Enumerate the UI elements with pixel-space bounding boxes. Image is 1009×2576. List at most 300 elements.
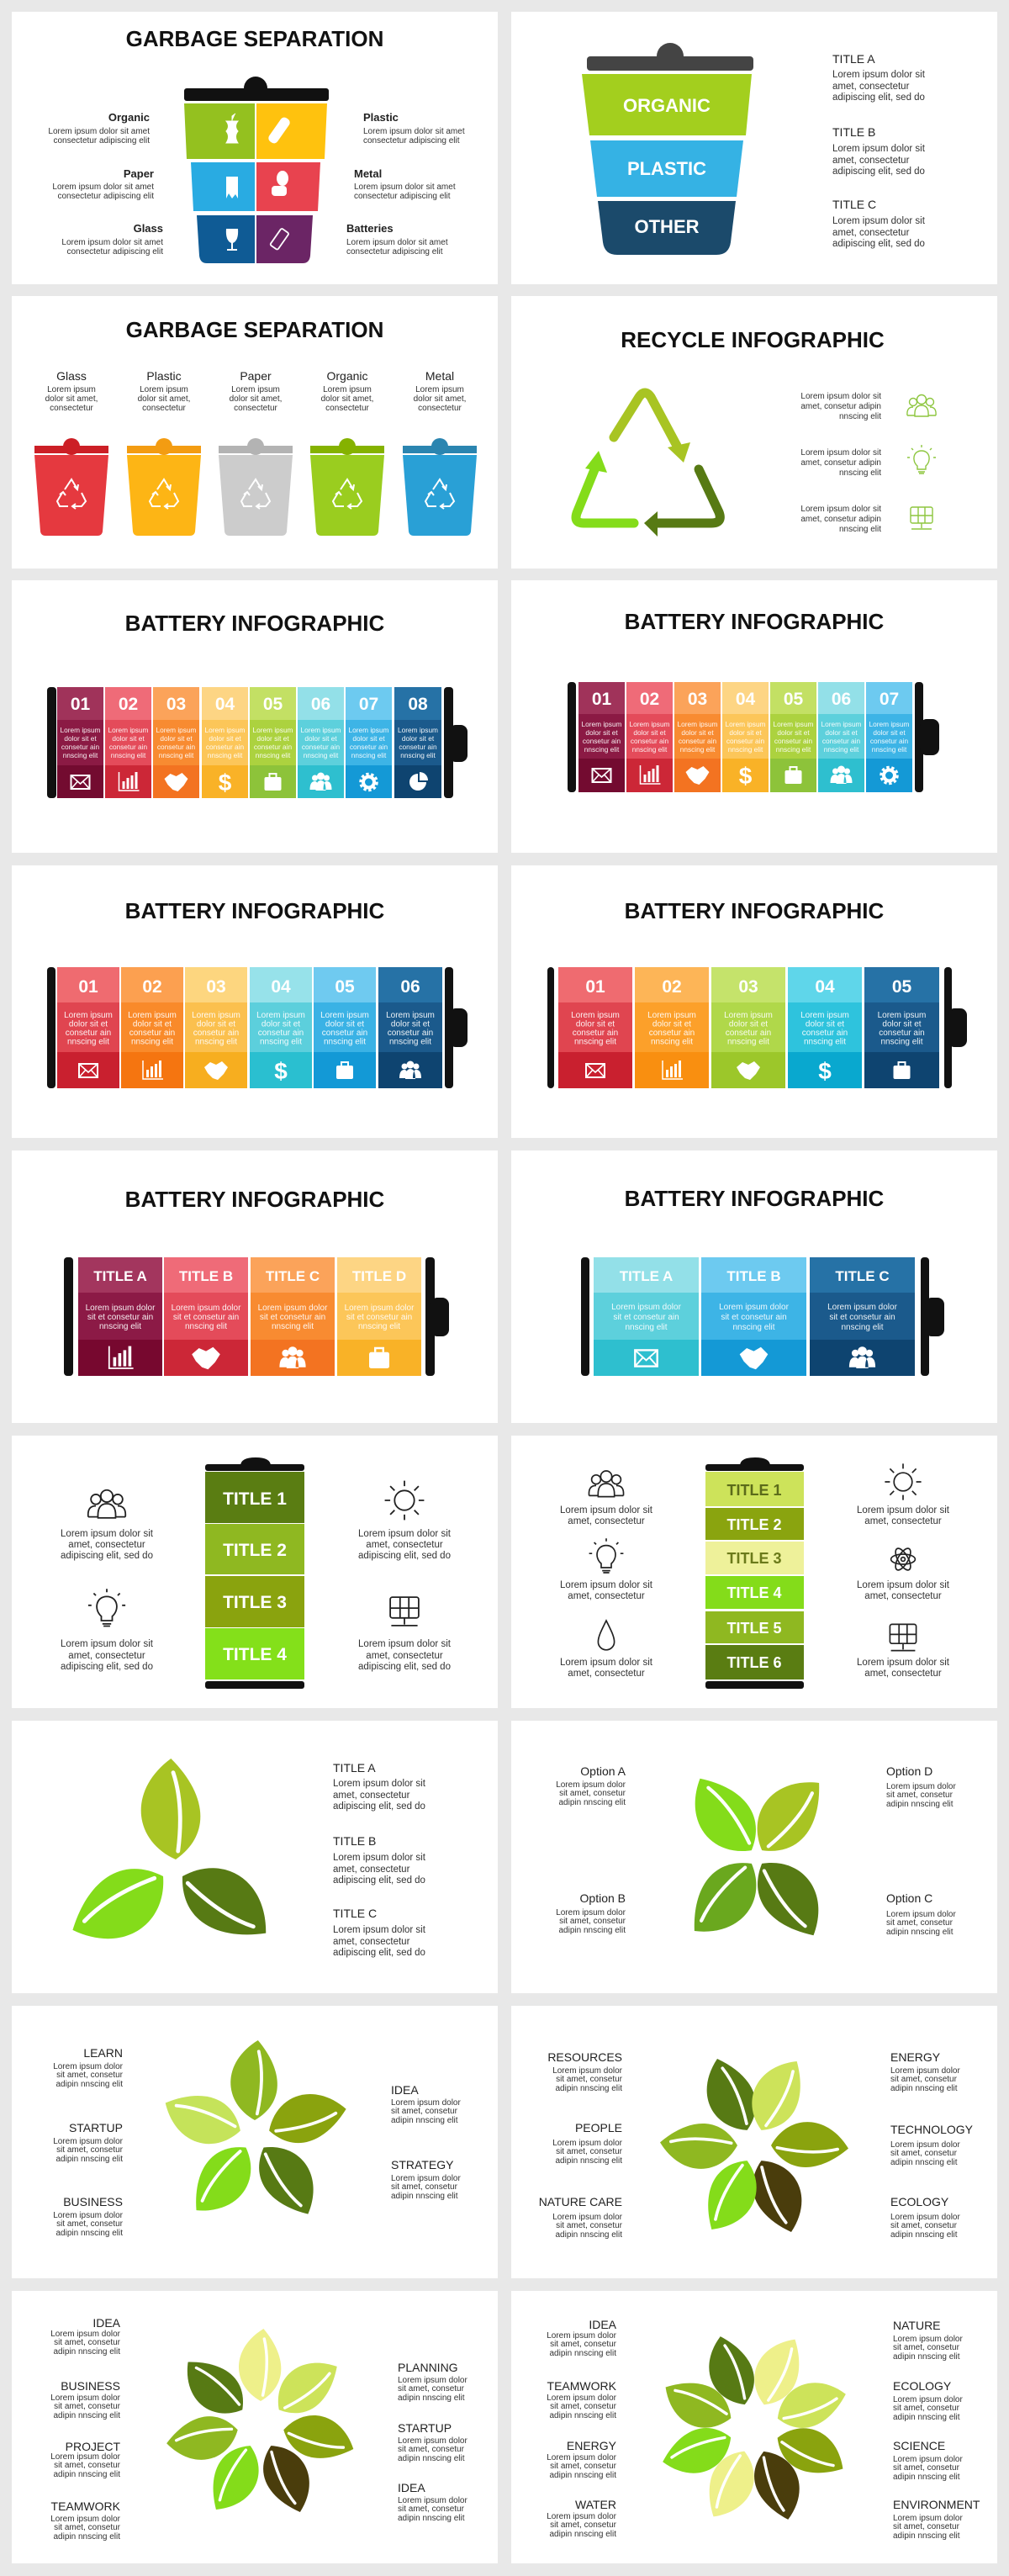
text blocks: amet, consectetur [333,1865,410,1875]
labels: TEAMWORK [547,2379,617,2393]
battery: consetur ain [61,743,99,751]
battery: dolor sit et [112,734,145,743]
labels: Lorem ipsum dolor [552,2066,623,2076]
title: BATTERY INFOGRAPHIC [625,1186,885,1211]
labels: Lorem ipsum dolor [391,2098,461,2108]
battery: 02 [142,977,162,997]
battery: nnscing elit [625,1323,668,1332]
labels: consectetur [50,404,94,413]
labels: dolor sit amet, [230,394,282,404]
labels: STRATEGY [391,2158,454,2171]
labels: sit amet, consetur [54,2402,121,2411]
battery [547,967,967,1088]
labels: sit amet, consetur [56,2219,124,2229]
labels: Plastic [146,369,182,383]
labels: adipin nnscing elit [550,2530,616,2539]
labels right: Batteries [346,222,394,235]
battery: 08 [408,695,428,714]
labels: adipin nnscing elit [54,2532,120,2542]
labels right: Plastic [363,111,399,124]
vertical battery: TITLE 2 [726,1516,782,1533]
battery: nnscing elit [351,751,387,759]
battery: Lorem ipsum [878,1011,926,1020]
labels: ENERGY [567,2439,617,2452]
labels: sit amet, consetur [54,2338,121,2347]
battery: 01 [78,977,98,997]
panel: three leaves [12,1721,498,1993]
text blocks: TITLE A [333,1761,376,1775]
battery: sit et consetur ain [613,1313,679,1322]
battery: sit et consetur ain [721,1313,787,1322]
text blocks: amet, consectetur [832,156,910,166]
text blocks: adipiscing elit, sed do [358,1662,451,1672]
labels left [48,111,163,257]
labels: TECHNOLOGY [890,2123,974,2136]
battery: dolor sit et [197,1019,235,1029]
labels: dolor sit amet, [138,394,190,404]
labels: RESOURCES [547,2050,622,2064]
labels right: consectetur adipiscing elit [346,247,443,257]
text blocks: TITLE C [333,1907,377,1920]
battery: Lorem ipsum [128,1011,177,1020]
battery: dolor sit et [585,728,618,737]
battery: 03 [206,977,226,997]
vertical battery: TITLE 5 [726,1620,782,1637]
labels [50,2316,468,2542]
labels: Lorem ipsum dolor [893,2514,963,2523]
labels: Lorem ipsum dolor [398,2436,468,2446]
text blocks: amet, consectetur [68,1651,145,1661]
labels: adipin nnscing elit [391,2116,458,2125]
options: sit amet, consetur [886,1918,954,1928]
labels: sit amet, consetur [391,2182,458,2192]
labels: adipin nnscing elit [893,2531,960,2541]
labels: sit amet, consetur [556,2221,623,2230]
labels: adipin nnscing elit [555,2084,622,2093]
labels: IDEA [391,2083,419,2097]
text blocks: TITLE B [832,125,875,139]
battery: consetur ain [726,1029,771,1038]
panel: four leaves options [511,1721,997,1993]
text rows: amet, consetur adipin [800,515,881,524]
text blocks: adipiscing elit, sed do [61,1662,153,1672]
labels: Lorem ipsum dolor [552,2139,623,2148]
battery: Lorem ipsum [647,1011,696,1020]
labels: Metal [425,369,454,383]
leaves [660,2050,848,2240]
labels: Lorem ipsum dolor [398,2376,468,2385]
text blocks: Lorem ipsum dolor sit [560,1580,653,1590]
panel: recycle infographic [511,296,997,569]
options: sit amet, consetur [886,1791,954,1800]
text blocks: adipiscing elit, sed do [333,1948,425,1958]
labels: Paper [240,369,272,383]
options: Option A [580,1764,626,1778]
battery: nnscing elit [824,745,859,754]
panel: battery 8 [12,580,498,853]
labels: PROJECT [66,2440,120,2453]
battery: consetur ain [129,1029,175,1038]
battery: Lorem ipsum [869,720,909,728]
icon: battery [270,228,289,250]
battery: nnscing elit [651,1038,693,1046]
panel: battery 6 [12,865,498,1138]
labels: sit amet, consetur [56,2145,124,2155]
text blocks: amet, consectetur [864,1516,942,1526]
labels: sit amet, consetur [556,2147,623,2156]
battery: 05 [892,977,911,997]
battery: nnscing elit [358,1322,400,1331]
battery: dolor sit et [352,734,385,743]
labels: sit amet, consetur [550,2462,617,2471]
battery: nnscing elit [872,745,907,754]
labels: ECOLOGY [890,2195,949,2208]
labels: ENVIRONMENT [893,2498,980,2511]
battery: nnscing elit [99,1322,141,1331]
labels right: consectetur adipiscing elit [363,136,460,145]
battery: Lorem ipsum [253,726,293,734]
vertical battery: TITLE 4 [726,1584,782,1601]
battery: Lorem ipsum [571,1011,620,1020]
text blocks: amet, consectetur [568,1669,645,1679]
labels: sit amet, consetur [550,2520,617,2530]
battery: dolor sit et [256,734,289,743]
text blocks: Lorem ipsum dolor sit [857,1580,950,1590]
battery: Lorem ipsum [774,720,813,728]
leaves [656,2330,853,2526]
battery: 03 [166,695,186,714]
labels right: Lorem ipsum dolor sit amet [363,127,465,136]
labels: adipin nnscing elit [398,2454,465,2463]
text blocks: adipiscing elit, sed do [358,1551,451,1561]
battery: consetur ain [879,1029,925,1038]
battery: Lorem ipsum [156,726,196,734]
battery: 02 [662,977,682,997]
battery: Lorem ipsum [726,720,765,728]
vertical battery: TITLE 4 [223,1645,287,1664]
text blocks: amet, consectetur [864,1669,942,1679]
vertical battery: TITLE 2 [223,1541,287,1560]
text blocks: amet, consectetur [333,1937,410,1947]
panel: battery 5 [511,865,997,1138]
labels: consectetur [418,404,462,413]
battery: sit et consetur ain [260,1313,325,1322]
battery: consetur ain [774,737,812,745]
battery: Lorem ipsum [724,1011,773,1020]
battery: dolor sit et [402,734,435,743]
options: Lorem ipsum dolor [556,1780,626,1790]
panel: vertical battery 6 [511,1436,997,1708]
battery: Lorem ipsum [320,1011,369,1020]
battery: dolor sit et [729,1019,768,1029]
labels: Lorem ipsum dolor [50,2452,121,2462]
labels: adipin nnscing elit [890,2084,958,2093]
battery: 02 [640,690,659,709]
text blocks: amet, consectetur [366,1651,443,1661]
text rows: amet, consetur adipin [800,458,881,468]
labels: Lorem ipsum dolor [547,2394,617,2403]
battery [581,1257,944,1376]
labels: sit amet, consetur [893,2463,960,2473]
battery: TITLE A [93,1268,147,1284]
battery: 01 [71,695,90,714]
panel: seven leaves [12,2291,498,2563]
text rows: amet, consetur adipin [800,402,881,411]
text blocks [832,52,926,249]
battery: Lorem ipsum dolor [611,1303,681,1312]
labels: Lorem ipsum dolor [893,2455,963,2464]
battery: consetur ain [109,743,147,751]
labels: adipin nnscing elit [555,2230,622,2240]
battery: sit et consetur ain [346,1313,412,1322]
text blocks: amet, consectetur [366,1540,443,1550]
labels: Lorem ipsum dolor [391,2174,461,2183]
bin: ORGANIC [623,95,711,116]
battery: consetur ain [573,1029,618,1038]
battery: consetur ain [206,743,244,751]
labels: Lorem ipsum dolor [50,2515,121,2524]
battery: consetur ain [350,743,388,751]
battery: consetur ain [302,743,340,751]
battery: TITLE B [179,1268,233,1284]
text blocks: adipiscing elit, sed do [61,1551,153,1561]
battery: dolor sit et [391,1019,430,1029]
battery [47,967,468,1088]
text blocks: Lorem ipsum dolor sit [857,1505,950,1515]
text blocks [560,1505,950,1679]
options: sit amet, consetur [559,1789,626,1798]
battery: dolor sit et [825,728,858,737]
labels: sit amet, consetur [890,2075,958,2084]
battery: nnscing elit [841,1323,884,1332]
labels: STARTUP [69,2121,123,2134]
labels: adipin nnscing elit [54,2411,120,2420]
battery: consetur ain [258,1029,304,1038]
text blocks: Lorem ipsum dolor sit [333,1925,426,1935]
labels: Lorem ipsum dolor [893,2335,963,2344]
options: Lorem ipsum dolor [886,1910,956,1919]
text blocks: Lorem ipsum dolor sit [61,1639,154,1649]
labels: sit amet, consetur [550,2402,617,2411]
labels: PEOPLE [575,2121,622,2134]
battery: Lorem ipsum [386,1011,435,1020]
labels: Lorem ipsum dolor [552,2213,623,2222]
text rows: nnscing elit [839,412,881,421]
text blocks: Lorem ipsum dolor sit [560,1658,653,1668]
battery: Lorem ipsum [582,720,621,728]
bin grid [184,77,329,263]
labels: dolor sit amet, [321,394,373,404]
labels: Lorem ipsum dolor [890,2140,960,2150]
labels: Lorem ipsum [415,385,464,394]
icon: paper [226,177,238,198]
panel: garbage separation grid bin [12,12,498,284]
vertical battery: TITLE 3 [223,1593,287,1612]
text blocks: TITLE C [832,198,876,211]
battery: nnscing elit [680,745,716,754]
text rows [800,392,881,534]
labels: sit amet, consetur [556,2075,623,2084]
text blocks: TITLE B [333,1834,376,1848]
battery: sit et consetur ain [829,1313,895,1322]
battery: nnscing elit [195,1038,237,1046]
labels right: consectetur adipiscing elit [354,192,451,201]
labels: sit amet, consetur [890,2149,958,2158]
battery: 05 [335,977,355,997]
battery: Lorem ipsum dolor [345,1304,414,1313]
labels: BUSINESS [61,2379,120,2393]
battery: consetur ain [822,737,860,745]
labels left: consectetur adipiscing elit [66,247,163,257]
battery: consetur ain [157,743,195,751]
battery: 06 [832,690,851,709]
options: Option B [580,1891,626,1905]
text blocks: Lorem ipsum dolor sit [333,1779,426,1789]
options [556,1764,956,1937]
battery: nnscing elit [776,745,811,754]
labels left: Lorem ipsum dolor sit amet [61,238,163,247]
battery: dolor sit et [160,734,193,743]
battery: dolor sit et [304,734,337,743]
battery: consetur ain [399,743,437,751]
labels right: Lorem ipsum dolor sit amet [354,182,456,192]
labels [539,2050,974,2240]
battery: consetur ain [583,737,621,745]
battery [64,1257,449,1376]
text blocks: amet, consectetur [568,1516,645,1526]
panel: eight leaves [511,2291,997,2563]
labels: sit amet, consetur [391,2107,458,2116]
vertical battery [205,1457,304,1689]
labels: Lorem ipsum dolor [53,2137,124,2146]
battery: 04 [215,695,235,714]
labels: SCIENCE [893,2439,945,2452]
labels: Lorem ipsum [47,385,96,394]
labels left: Glass [134,222,163,235]
battery: nnscing elit [67,1038,109,1046]
options: Lorem ipsum dolor [886,1782,956,1791]
title: BATTERY INFOGRAPHIC [125,898,385,923]
battery: 03 [688,690,707,709]
battery: 02 [119,695,138,714]
labels: sit amet, consetur [56,2071,124,2080]
battery: nnscing elit [111,751,146,759]
labels: adipin nnscing elit [893,2473,960,2482]
labels left: consectetur adipiscing elit [57,192,154,201]
labels: NATURE CARE [539,2195,622,2208]
labels: sit amet, consetur [890,2221,958,2230]
labels: consectetur [325,404,370,413]
battery: dolor sit et [133,1019,172,1029]
labels: adipin nnscing elit [54,2347,120,2356]
labels: LEARN [83,2046,123,2060]
battery: dolor sit et [681,728,714,737]
battery: nnscing elit [159,751,194,759]
labels: adipin nnscing elit [890,2158,958,2167]
bin [582,43,753,255]
vertical battery: TITLE 1 [223,1489,287,1509]
text blocks: Lorem ipsum dolor sit [857,1658,950,1668]
battery: nnscing elit [632,745,668,754]
battery: dolor sit et [64,734,97,743]
battery: nnscing elit [727,1038,769,1046]
labels: consectetur [142,404,187,413]
battery: 01 [592,690,611,709]
labels: NATURE [893,2319,941,2332]
text blocks: amet, consectetur [68,1540,145,1550]
leaves [157,2040,352,2226]
labels: adipin nnscing elit [55,2080,123,2089]
labels: sit amet, consetur [398,2445,465,2454]
battery: 05 [263,695,283,714]
icon: bottle [267,116,292,145]
battery: Lorem ipsum [256,1011,305,1020]
labels left: Paper [124,167,154,180]
labels: Lorem ipsum dolor [547,2512,617,2521]
labels: sit amet, consetur [893,2343,960,2352]
text blocks: Lorem ipsum dolor sit [832,216,926,226]
battery: dolor sit et [325,1019,364,1029]
battery: nnscing elit [256,751,291,759]
battery: consetur ain [254,743,292,751]
text blocks [333,1761,426,1958]
battery: dolor sit et [576,1019,615,1029]
title: GARBAGE SEPARATION [126,317,383,342]
battery: nnscing elit [574,1038,616,1046]
battery: sit et consetur ain [173,1313,239,1322]
battery: consetur ain [322,1029,367,1038]
battery: Lorem ipsum [64,1011,113,1020]
labels right: Metal [354,167,382,180]
labels [53,2046,461,2238]
battery: dolor sit et [69,1019,108,1029]
battery: consetur ain [388,1029,433,1038]
vertical battery: TITLE 3 [726,1550,782,1567]
icons [589,1463,922,1651]
text rows: nnscing elit [839,525,881,534]
labels: STARTUP [398,2421,452,2435]
options: adipin nnscing elit [558,1926,626,1935]
battery: nnscing elit [880,1038,923,1046]
battery: Lorem ipsum [192,1011,240,1020]
panel: battery titles A-D [12,1150,498,1423]
labels: Organic [326,369,368,383]
panel: five bins [12,296,498,569]
panel: battery 7 [511,580,997,853]
labels: sit amet, consetur [54,2523,121,2532]
text blocks: Lorem ipsum dolor sit [358,1639,452,1649]
battery: Lorem ipsum [349,726,388,734]
battery: nnscing elit [208,751,243,759]
battery: nnscing elit [400,751,436,759]
title: BATTERY INFOGRAPHIC [125,1187,385,1212]
battery: consetur ain [193,1029,239,1038]
labels: Lorem ipsum dolor [53,2062,124,2071]
labels: Lorem ipsum dolor [893,2395,963,2404]
text rows: Lorem ipsum dolor sit [800,392,881,401]
leaves [59,1757,284,1960]
battery: Lorem ipsum [398,726,438,734]
battery: Lorem ipsum [800,1011,849,1020]
battery: consetur ain [679,737,716,745]
battery: Lorem ipsum [61,726,100,734]
options: Option C [886,1891,932,1905]
icons green [907,395,936,529]
options: sit amet, consetur [559,1917,626,1926]
labels: dolor sit amet, [45,394,98,404]
icons [88,1481,424,1627]
text blocks: adipiscing elit, sed do [333,1801,425,1812]
